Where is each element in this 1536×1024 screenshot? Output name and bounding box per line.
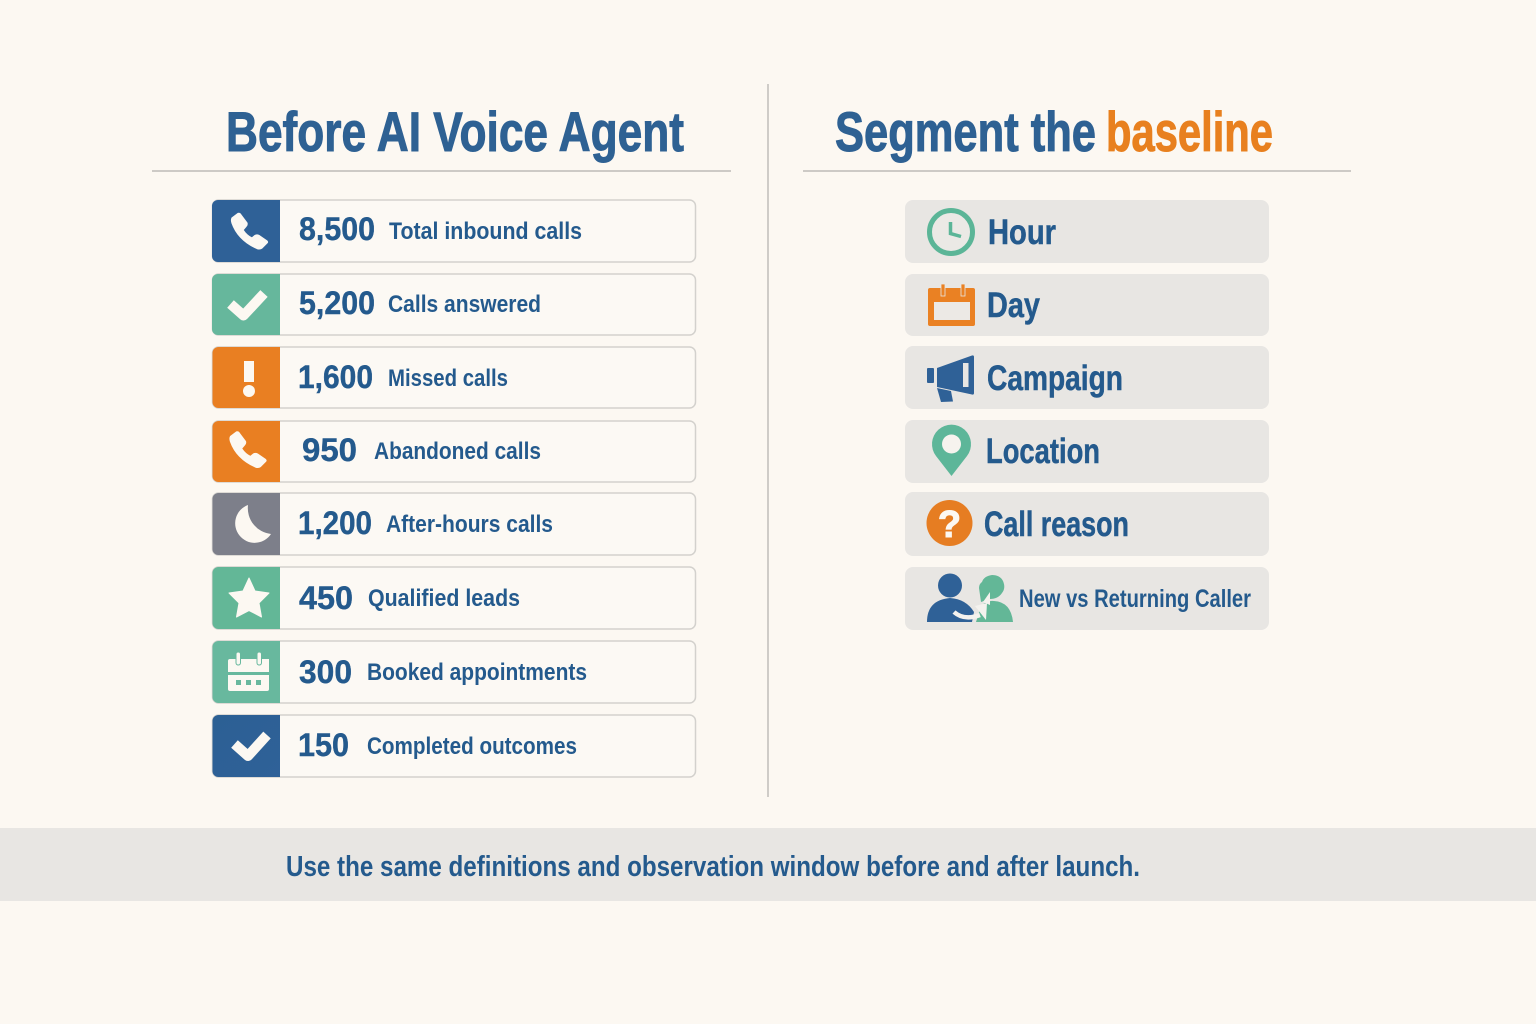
value: 450: 450: [299, 580, 353, 616]
row: completed outcomes: [212, 715, 696, 777]
panel: before AI voice agent: [152, 100, 731, 777]
label: completed outcomes: Completed outcomes: [367, 733, 577, 760]
icon: question mark: ?: [938, 504, 961, 546]
label: hour: Hour: [988, 213, 1056, 252]
value: 8,500: 8,500: [299, 211, 375, 247]
icon: check: [212, 715, 280, 777]
value: 950: 950: [302, 432, 357, 468]
label: qualified leads: Qualified leads: [368, 585, 520, 612]
icon: calendar: [928, 284, 975, 326]
value: 300: 300: [299, 654, 352, 690]
icon: map pin: [932, 425, 971, 476]
label: after-hours calls: After-hours calls: [386, 511, 553, 538]
label: new vs returning caller: New vs Returning Caller: [1019, 585, 1251, 613]
footer band: [0, 828, 1536, 901]
label: total inbound calls: Total inbound calls: [389, 218, 582, 245]
footer note: Use the same definitions and observation window before and after launch.: [286, 851, 1140, 883]
segment: campaign: [905, 346, 1269, 409]
label: abandoned calls: Abandoned calls: [374, 438, 541, 465]
icon: calendar: [212, 641, 280, 703]
label: campaign: Campaign: [987, 359, 1123, 398]
label: day: Day: [987, 286, 1040, 325]
label: calls answered: Calls answered: [388, 291, 541, 318]
row: booked appointments: [212, 641, 696, 703]
segment: call reason: [905, 492, 1269, 556]
value: 1,200: 1,200: [298, 505, 372, 541]
value: 5,200: 5,200: [299, 285, 375, 321]
heading: segment the baseline: Segment the: [835, 100, 1096, 163]
panel: segment the baseline: [803, 100, 1351, 630]
row: abandoned calls: [212, 421, 696, 482]
icon: two people with arrow: [927, 574, 1013, 622]
label: call reason: Call reason: [984, 505, 1129, 544]
icon: moon: [212, 493, 280, 555]
row: calls answered: [212, 274, 696, 335]
label: location: Location: [986, 432, 1100, 471]
row: total inbound calls: [212, 200, 696, 262]
row: missed calls: [212, 347, 696, 408]
icon: exclamation: [212, 347, 280, 408]
icon: megaphone: [927, 355, 974, 402]
icon: clock: [930, 210, 972, 254]
icon: question mark: [926, 500, 972, 546]
label: missed calls: Missed calls: [388, 365, 508, 392]
segment: new vs returning caller: [905, 567, 1269, 630]
icon: phone: [212, 200, 280, 262]
segment: location: [905, 420, 1269, 483]
row: qualified leads: [212, 567, 696, 629]
heading: before AI voice agent: Before AI Voice Agent: [226, 100, 684, 163]
row: after-hours calls: [212, 493, 696, 555]
icon: phone: [212, 421, 280, 482]
value: 1,600: 1,600: [298, 359, 373, 395]
heading: segment the baseline: baseline: [1106, 100, 1273, 163]
label: booked appointments: Booked appointments: [367, 659, 587, 686]
value: 150: 150: [298, 727, 349, 763]
segment: day: [905, 274, 1269, 336]
segment: hour: [905, 200, 1269, 263]
icon: check: [212, 274, 280, 335]
icon: star: [212, 567, 280, 629]
